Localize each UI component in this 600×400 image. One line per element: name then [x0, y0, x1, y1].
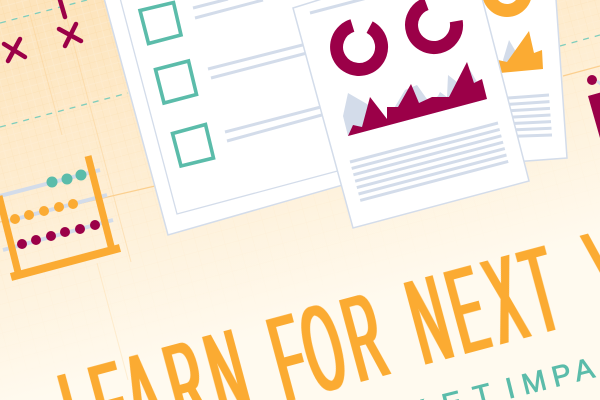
- report text lines: [350, 123, 508, 200]
- icon: info figure: [587, 75, 600, 145]
- checkbox 1: [140, 2, 181, 44]
- checkbox 2: [156, 61, 196, 103]
- donut chart left: [337, 26, 382, 69]
- document: back report: [470, 0, 567, 163]
- icon: abacus: [0, 156, 120, 277]
- checklist text lines: [193, 0, 340, 141]
- document: checklist page: [104, 0, 395, 235]
- donut chart right: [412, 4, 457, 48]
- document: front report: [293, 0, 529, 228]
- area chart: [343, 62, 487, 136]
- checkbox 3: [172, 124, 214, 166]
- icon: cross marks chart: [4, 0, 81, 61]
